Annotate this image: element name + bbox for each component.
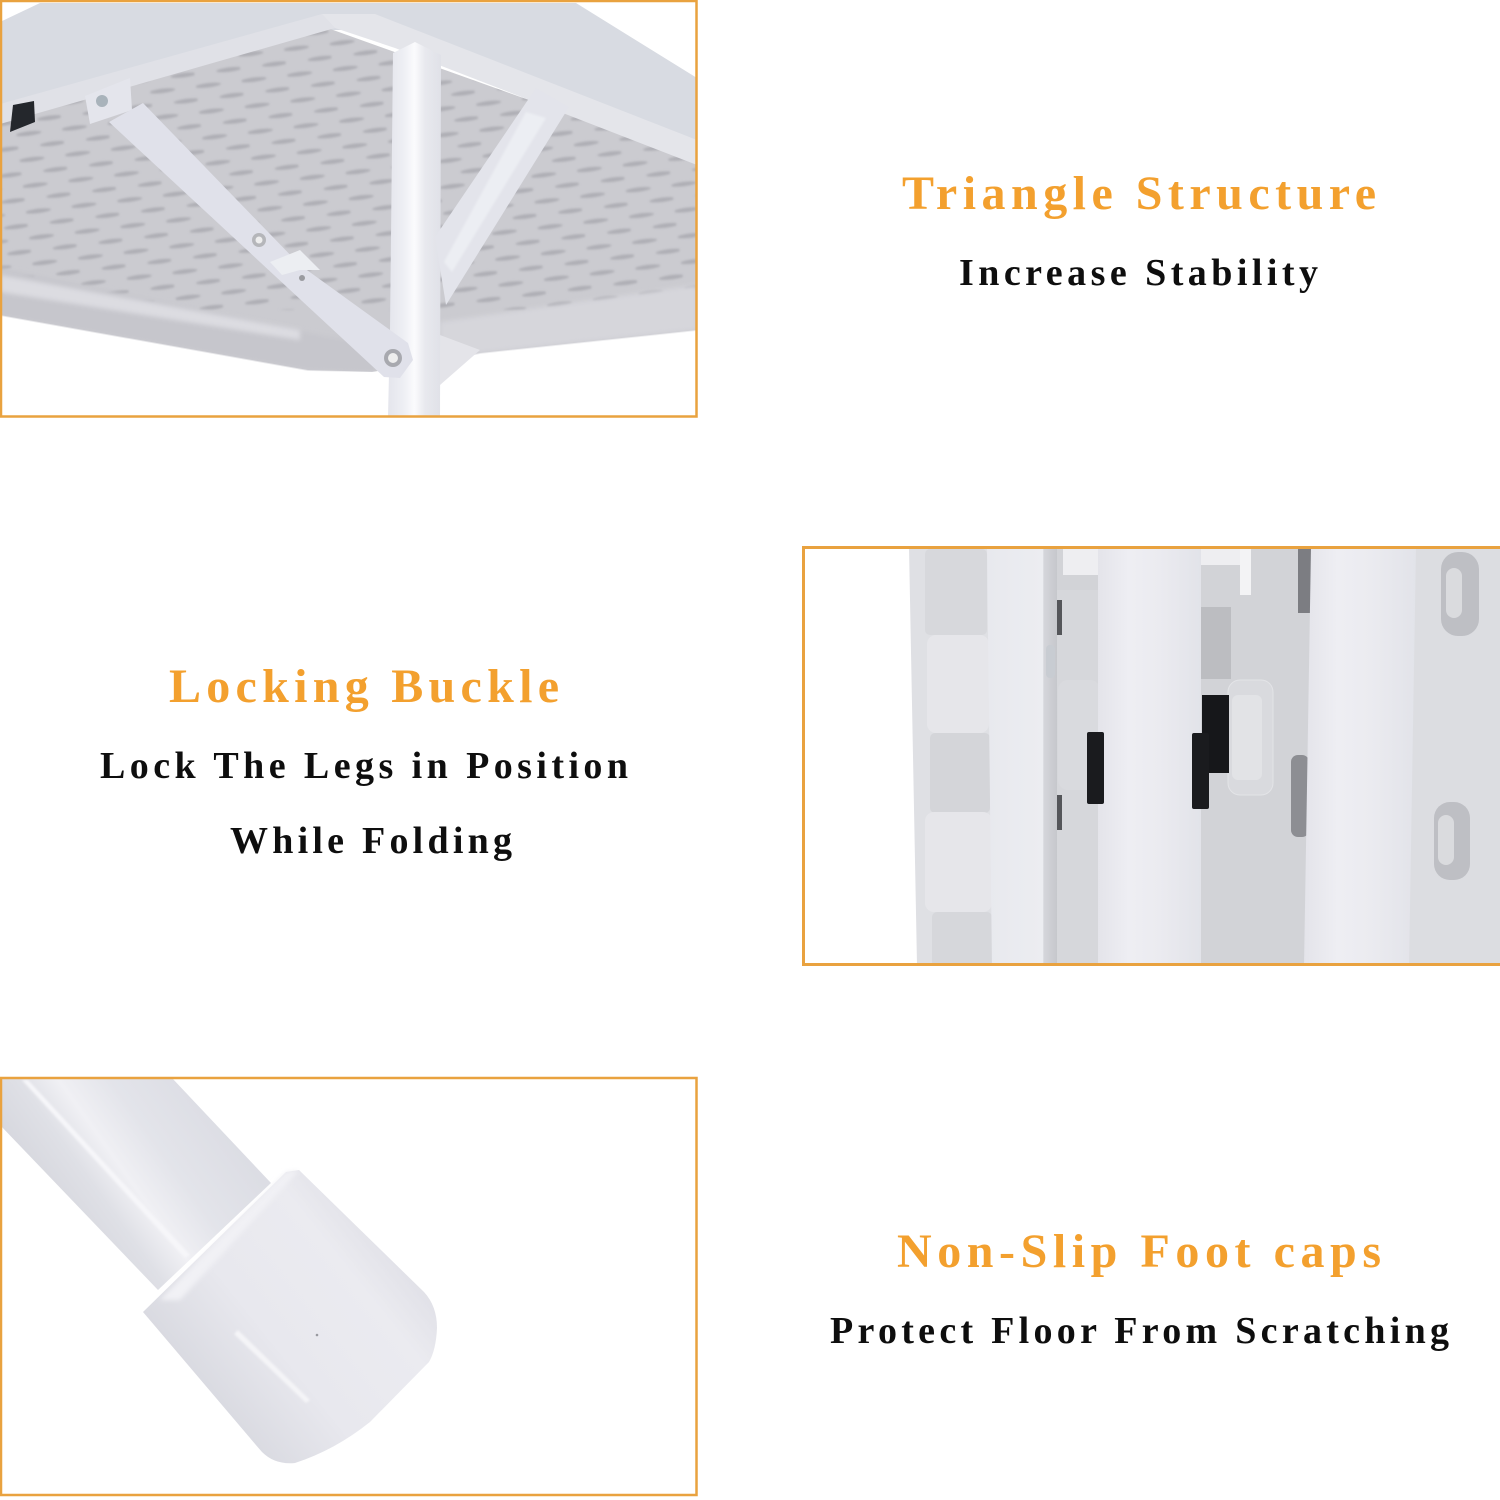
tube one <box>1098 547 1201 967</box>
black latches <box>1087 732 1209 809</box>
heading: Locking Buckle: Locking Buckle <box>169 660 559 713</box>
frame rail left <box>2 26 330 124</box>
rear leg triangle <box>440 335 480 385</box>
table top rim <box>2 3 696 140</box>
white top hardware <box>1063 547 1251 595</box>
right plastic panel <box>1405 547 1500 967</box>
text: Lock The Legs in Position While Folding <box>100 745 628 862</box>
heading: Non-Slip Foot caps: Non-Slip Foot caps <box>897 1225 1381 1278</box>
panel 1 border <box>1 1 696 416</box>
tube two <box>1304 547 1416 967</box>
text: Lock The Legs in Position While Folding: While Folding <box>230 820 512 862</box>
panel 3 border <box>1 1078 696 1495</box>
panel: locking buckle photo <box>909 547 1500 970</box>
leg tube <box>0 1078 271 1290</box>
text: Protect Floor From Scratching: Protect Floor From Scratching <box>830 1310 1449 1352</box>
rubber foot cap <box>143 1170 437 1463</box>
bottom skirt <box>0 268 375 372</box>
left plastic panel <box>909 547 992 967</box>
vertical leg <box>388 42 441 417</box>
perforated underside <box>0 20 697 372</box>
dark slots <box>1298 547 1312 613</box>
flat rail <box>987 547 1057 967</box>
panel: triangle structure photo <box>0 3 697 417</box>
screw <box>1046 646 1048 676</box>
tube highlight <box>23 1080 152 1218</box>
black clip <box>10 101 35 132</box>
pocket behind latch <box>1201 607 1231 679</box>
diagonal brace <box>85 78 413 378</box>
white floor area <box>2 316 695 374</box>
panel 2 border <box>804 548 1500 964</box>
right brace <box>440 100 564 305</box>
heading: Triangle Structure: Triangle Structure <box>902 167 1376 220</box>
text: Lock The Legs in Position While Folding: Lock The Legs in Position <box>100 745 628 787</box>
text: Increase Stability: Increase Stability <box>959 252 1318 294</box>
frame rail right <box>322 14 697 165</box>
panel: foot cap photo <box>0 1078 437 1463</box>
center backing <box>1056 547 1316 967</box>
